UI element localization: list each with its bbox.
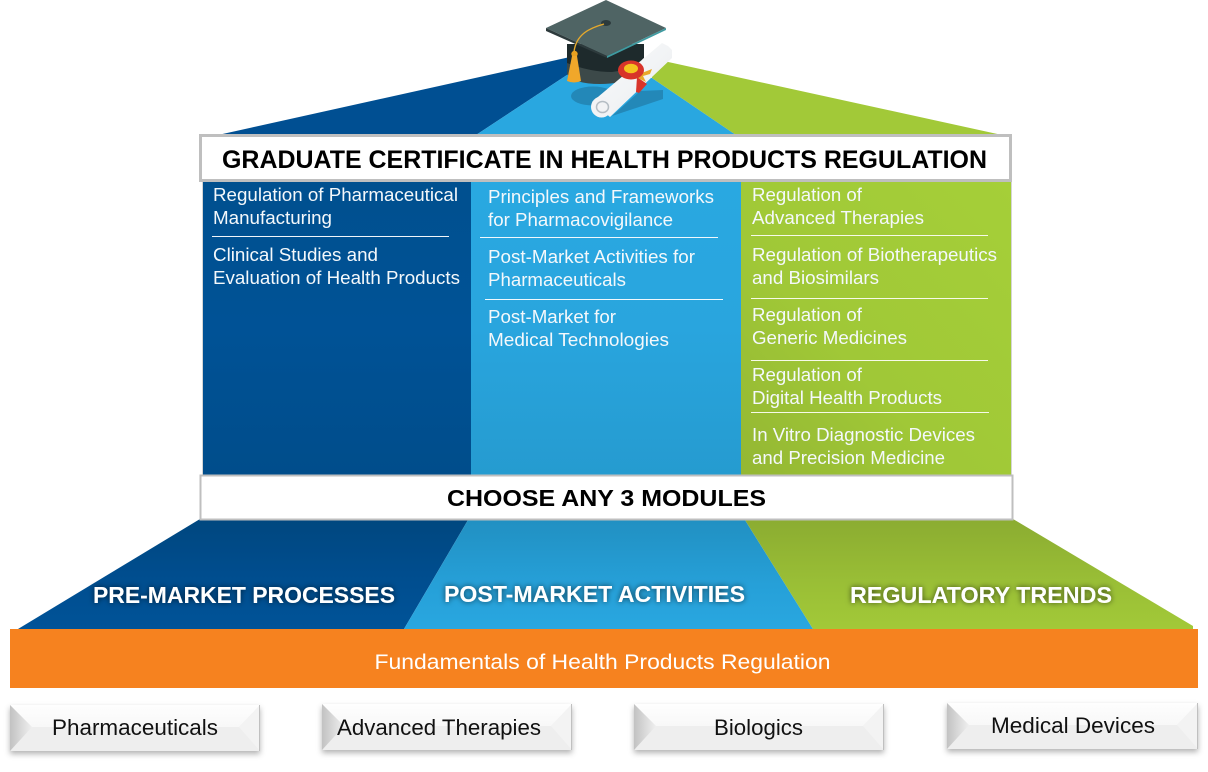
button: advanced therapies [322,704,572,750]
module column: regulatory trends modules: In Vitro Diagnostic Devices [752,424,975,445]
module column: pre-market modules: Manufacturing [213,207,332,228]
module column: post-market modules [471,181,741,475]
banner: choose any 3 modules [200,476,1012,520]
title banner [200,136,1010,180]
module column: regulatory trends modules: Advanced Therapies [752,207,924,228]
module column: post-market modules: Post-Market for [488,306,616,327]
module column: pre-market modules: Clinical Studies and [213,244,378,265]
base: pre-market processes: PRE-MARKET PROCESSES [93,582,395,608]
button: pharmaceuticals [10,705,260,751]
module column: pre-market modules [202,181,471,475]
module column: post-market modules: Post-Market Activities for [488,246,695,267]
base: regulatory trends [745,519,1193,629]
module column: pre-market modules: Evaluation of Health Products [213,267,460,288]
module column: post-market modules: Pharmaceuticals [488,269,626,290]
module column: pre-market modules: Regulation of Pharmaceutical [213,184,458,205]
button: pharmaceuticals: Pharmaceuticals [52,715,218,740]
banner: choose any 3 modules: CHOOSE ANY 3 MODULES [447,485,766,511]
base: pre-market processes [18,519,468,629]
module column: regulatory trends modules: Regulation of Biotherapeutics [752,244,997,265]
module column: post-market modules: Medical Technologies [488,329,669,350]
roof: green wedge [650,58,1002,135]
base: post-market activities [404,520,813,629]
button: biologics [634,704,884,750]
base: post-market activities: POST-MARKET ACTIVITIES [444,581,745,607]
module column: post-market modules: Principles and Frameworks [488,186,714,207]
button: advanced therapies: Advanced Therapies [337,715,541,740]
title banner: GRADUATE CERTIFICATE IN HEALTH PRODUCTS REGULATION [222,146,987,174]
module column: post-market modules: for Pharmacovigilance [488,209,673,230]
module column: regulatory trends modules: and Precision Medicine [752,447,945,468]
module column: regulatory trends modules: Digital Health Products [752,387,942,408]
module column: regulatory trends modules [741,181,1012,475]
button: medical devices [947,703,1198,749]
module column: regulatory trends modules: and Biosimilars [752,267,879,288]
icon: graduation cap and diploma [546,0,672,118]
roof: light blue wedge [476,62,736,135]
base: regulatory trends: REGULATORY TRENDS [850,582,1112,608]
module column: regulatory trends modules: Regulation of [752,364,863,385]
roof: dark blue wedge [218,57,570,135]
foundation bar: fundamentals [10,629,1198,688]
button: medical devices: Medical Devices [991,713,1155,738]
button: biologics: Biologics [714,715,803,740]
foundation bar: fundamentals: Fundamentals of Health Products Regulation [374,650,830,674]
module column: regulatory trends modules: Regulation of [752,184,863,205]
module column: regulatory trends modules: Regulation of [752,304,863,325]
module column: regulatory trends modules: Generic Medicines [752,327,907,348]
